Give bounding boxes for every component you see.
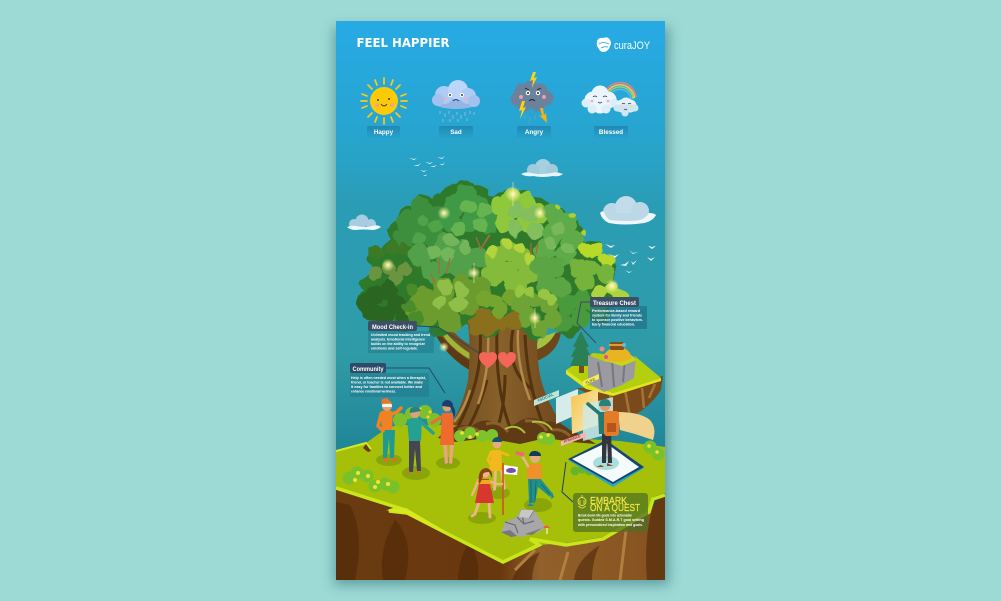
person: boy in orange	[515, 451, 554, 512]
mushroom	[543, 526, 550, 534]
screens and hashtag signs	[534, 374, 613, 446]
person: woman in orange	[432, 400, 460, 469]
label: Happy: Happy	[374, 129, 394, 136]
panel: Community text: enhance emotional wellness.	[351, 388, 396, 394]
tree	[366, 182, 620, 442]
panel: Mood Check-in text: builds on the ability to recognize	[371, 341, 426, 346]
connector: embark	[562, 462, 573, 502]
tree canopy	[366, 190, 620, 328]
cloud: left	[347, 214, 381, 230]
rock pile	[501, 509, 546, 537]
heading: Mood Check-in: Mood Check-in	[372, 324, 413, 331]
logo: curaJOY	[597, 37, 651, 52]
label: Sad: Sad	[450, 129, 462, 136]
panel: Treasure Chest text: system for family and friends	[592, 312, 642, 318]
bush: centre	[460, 433, 492, 437]
heading: Embark on a Quest	[590, 496, 640, 514]
bush: right of trunk	[541, 435, 549, 439]
panel: Community text: Help is often needed most when a therapist,	[351, 375, 426, 380]
panel: Mood Check-in text	[368, 321, 434, 353]
tree roots	[438, 418, 596, 444]
rock pillar	[588, 355, 636, 392]
heading: Embark on a Quest: ON A QUEST	[590, 503, 640, 514]
birds: right flock	[605, 244, 656, 273]
panel: Mood Check-in text: Unlimited mood tracking and trend	[371, 332, 431, 337]
heading: Community: Community	[352, 366, 384, 373]
label: Blessed: Blessed	[599, 129, 623, 136]
icon: treasure pile	[600, 342, 632, 362]
weather icon: blessed clouds and rainbow	[586, 83, 636, 113]
bush: behind people	[400, 409, 434, 420]
panel: Community text	[350, 363, 429, 397]
bush: beside tablet	[575, 469, 589, 471]
logo: curaJOY: curaJOY	[614, 40, 651, 52]
panel: Treasure Chest text	[590, 297, 647, 329]
panel: Mood Check-in text: analysis. Emotional intelligence	[371, 336, 426, 342]
person: man in teal	[402, 407, 433, 480]
hearts	[479, 352, 516, 368]
heading: Treasure Chest: Treasure Chest	[593, 300, 637, 307]
title: FEEL HAPPIER	[356, 35, 450, 50]
panel: Embark on a Quest	[573, 493, 648, 532]
heading: Embark on a Quest: EMBARK	[590, 496, 627, 507]
cliff rock facets	[336, 495, 665, 580]
panel: Mood Check-in text: emotions and self-regulate.	[371, 346, 418, 350]
weather icon: angry cloud	[518, 72, 547, 124]
label: Sad	[439, 126, 473, 136]
panel: Embark on a Quest: Break down life goals into actionable	[578, 512, 633, 518]
label: Happy	[367, 126, 400, 136]
icon: pine tree	[570, 331, 592, 373]
panel: Community text: friend, or teacher is not available. We make	[351, 380, 424, 384]
panel: Treasure Chest text: Performance-based reward	[592, 308, 641, 313]
weather icon: sad cloud	[432, 80, 480, 122]
tree twigs	[431, 235, 538, 284]
grass rim	[336, 488, 665, 562]
icon: quest badge	[578, 495, 586, 508]
sand path	[618, 412, 654, 440]
weather icon: happy sun	[361, 78, 407, 124]
flag	[503, 463, 518, 515]
floating island: treasure chest	[566, 331, 663, 418]
dirt patch	[363, 444, 371, 452]
ground island	[336, 412, 665, 581]
cloud: right	[600, 196, 656, 224]
cloud: top centre	[521, 159, 563, 177]
panel: Embark on a Quest: with personalized inspiration and goals.	[577, 522, 643, 527]
poster shadow	[334, 27, 669, 585]
poster	[336, 21, 665, 581]
tree sparkles	[382, 182, 619, 352]
panel: Treasure Chest text: Early financial education.	[592, 322, 635, 326]
panel: Community text: it easy for families to connect better and	[351, 384, 423, 389]
panel: Treasure Chest text: to sponsor positive behaviors.	[592, 317, 643, 322]
bush: left ground	[349, 473, 393, 487]
label: Angry: Angry	[525, 129, 544, 136]
label: Angry	[517, 126, 551, 136]
grass rim wide band	[386, 508, 448, 535]
birds: upper flock	[409, 156, 445, 176]
person: woman with visor	[376, 398, 402, 466]
person: girl in red dress	[468, 468, 502, 524]
bush: far right	[649, 446, 658, 454]
sign: pink: #FINANCE	[563, 434, 582, 444]
panel: Embark on a Quest: quests. Guided S.M.A.R.T goal setting	[578, 517, 645, 522]
grass top	[336, 425, 665, 562]
person: boy in yellow	[488, 437, 510, 499]
connector: mood check-in	[417, 326, 479, 353]
sign: life: #LIFE	[585, 377, 596, 385]
sign: social: #SOCIAL	[537, 392, 555, 403]
cliff	[336, 488, 665, 581]
hiker	[588, 399, 619, 467]
connector: treasure chest	[577, 302, 596, 343]
label: Blessed	[594, 126, 628, 136]
tree trunk	[436, 325, 562, 427]
tablet with hiker	[568, 399, 644, 487]
connector: community	[386, 368, 445, 393]
